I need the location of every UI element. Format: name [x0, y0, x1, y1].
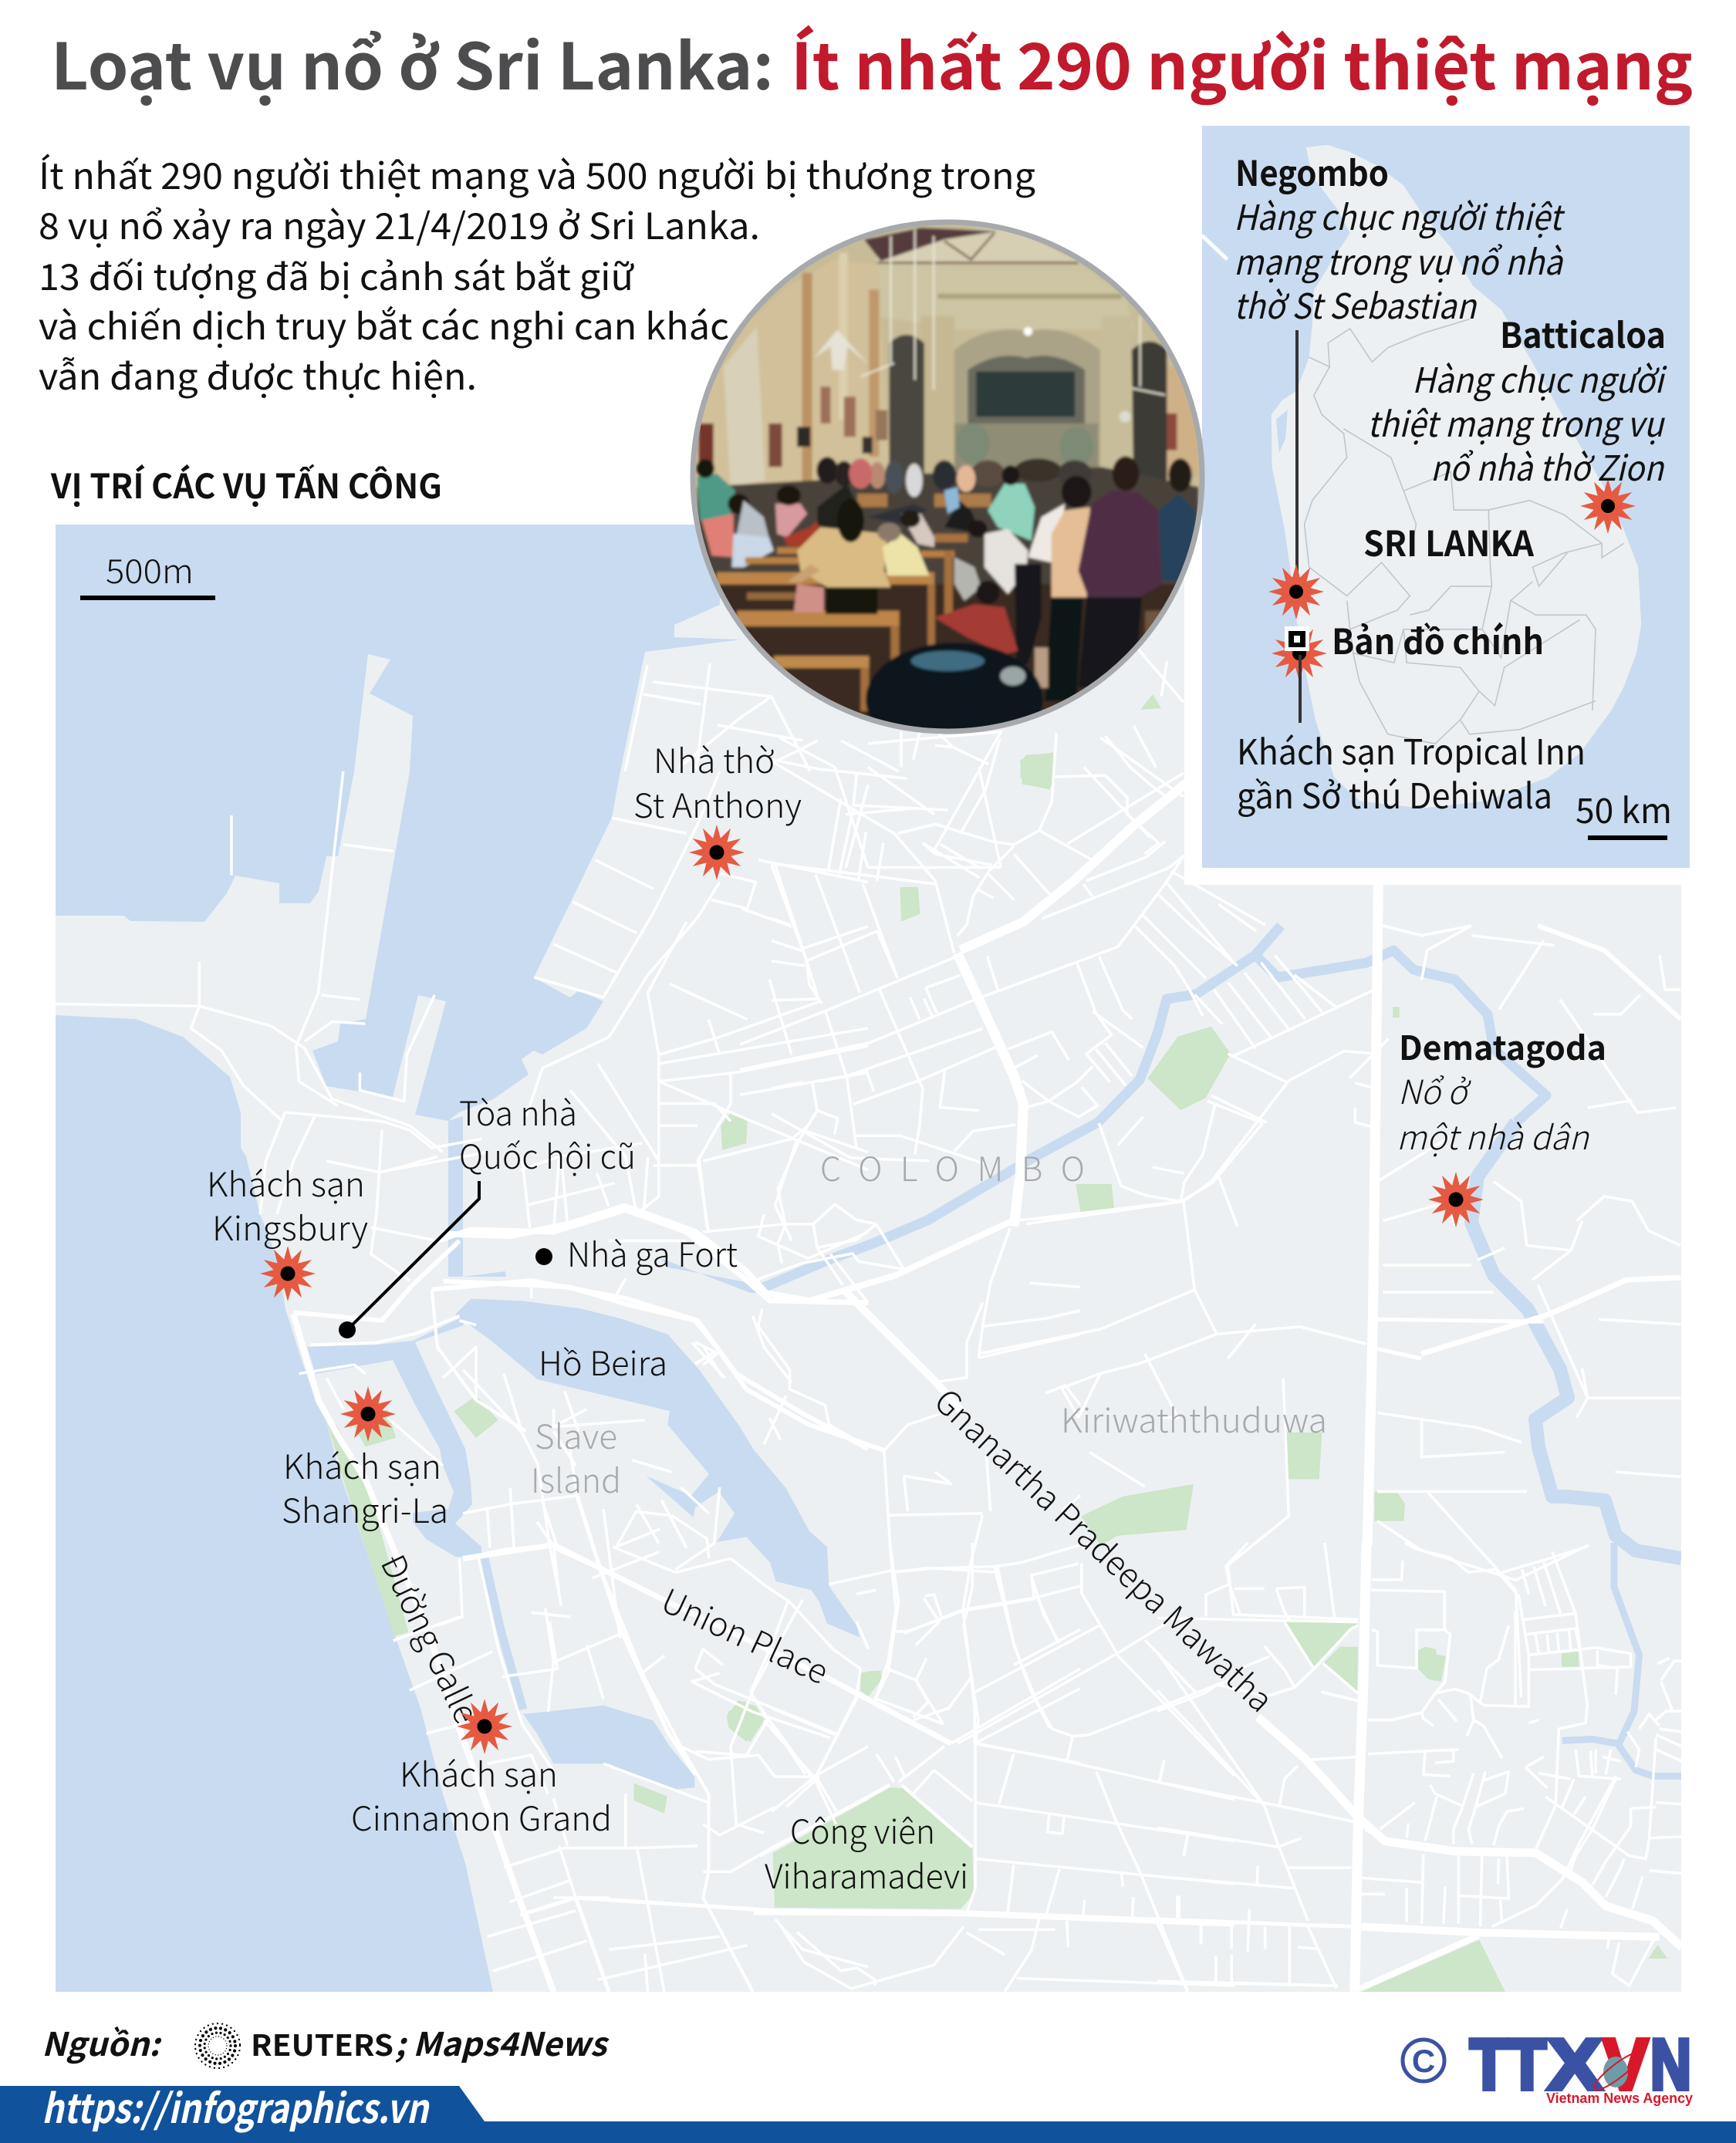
map labels: Union Place [654, 1575, 837, 1694]
inset labels: Hàng chục người [1412, 353, 1667, 403]
map labels: Island [531, 1455, 621, 1503]
source line: REUTERS [251, 2022, 393, 2064]
blast marker: Dematagoda [1428, 1172, 1484, 1227]
map labels: COLOMBO [820, 1143, 1085, 1191]
logo: TTXVN: N [1650, 2024, 1691, 2104]
map labels: Khách sạn [283, 1441, 441, 1489]
map labels: Gnanartha Pradeepa Mawatha [925, 1376, 1285, 1721]
inset labels: gần Sở thú Dehiwala [1237, 768, 1552, 818]
scale bar: 50 km [1588, 835, 1667, 840]
map labels [106, 545, 1606, 1898]
source line [42, 2019, 610, 2068]
panel: white margin around inset [1184, 525, 1736, 885]
map labels: Viharamadevi [765, 1851, 968, 1898]
map labels: Nhà thờ [654, 735, 775, 783]
map labels: Công viên [790, 1806, 935, 1854]
inset labels: Bản đồ chính [1332, 614, 1544, 664]
inset labels: mạng trong vụ nổ nhà [1234, 235, 1564, 285]
road network [56, 637, 1682, 1992]
map labels: Khách sạn [400, 1749, 558, 1797]
heading: attack locations: VỊ TRÍ CÁC VỤ TẤN CÔNG [50, 459, 442, 508]
copyright symbol: C [1412, 2043, 1435, 2079]
marker: Fort station [535, 1248, 552, 1265]
inset labels: Hàng chục người thiệt [1234, 190, 1565, 240]
map labels: 500m [106, 545, 194, 593]
blast marker: Batticaloa [1580, 478, 1636, 534]
map labels: Đường Galle [370, 1545, 492, 1730]
logo: TTXVN: TT [1470, 2024, 1546, 2104]
panel: Sri Lanka inset map [1202, 126, 1690, 868]
intro text block [39, 147, 1035, 400]
inset labels: thiệt mạng trong vụ [1367, 397, 1665, 447]
map labels: Nổ ở [1398, 1066, 1471, 1114]
island land shape [1202, 145, 1641, 808]
inset labels: SRI LANKA [1363, 516, 1535, 566]
blast marker: St Anthony [689, 825, 745, 880]
logo: TTXVN: Vietnam News Agency [1546, 2091, 1693, 2106]
footer URL: https://infographics.vn [42, 2077, 430, 2135]
callout line: old parliament building [339, 1181, 479, 1338]
map labels: St Anthony [633, 780, 802, 828]
map labels: Tòa nhà [459, 1088, 577, 1136]
map labels: một nhà dân [1397, 1112, 1590, 1159]
map labels: Cinnamon Grand [351, 1793, 612, 1841]
map labels: Kingsbury [212, 1203, 368, 1250]
photo: church interior after the blast [687, 216, 1211, 756]
intro text block: 13 đối tượng đã bị cảnh sát bắt giữ [39, 248, 635, 301]
copyright symbol [1403, 2040, 1444, 2081]
source line: Nguồn: [42, 2019, 162, 2066]
source line: ; [395, 2019, 408, 2066]
blast marker: Kingsbury [260, 1246, 316, 1301]
panel: Colombo street map [56, 525, 1682, 1992]
logo: TTXVN: X [1548, 2024, 1602, 2104]
title [51, 15, 1693, 108]
Tropical Inn leader line [1299, 655, 1302, 723]
intro text block: Ít nhất 290 người thiệt mạng và 500 người bị thương trong [39, 147, 1035, 200]
inset labels: Batticaloa [1500, 308, 1666, 358]
water: harbour, sea, lakes and canals [56, 525, 1682, 1992]
logo: TTXVN [1403, 2024, 1693, 2106]
title: Ít nhất 290 người thiệt mạng [791, 15, 1693, 108]
inset labels: thờ St Sebastian [1234, 278, 1478, 329]
map labels: Dematagoda [1399, 1022, 1606, 1070]
inset labels: 50 km [1576, 783, 1672, 833]
map labels: Hồ Beira [539, 1338, 667, 1385]
blast marker: Cinnamon Grand [457, 1699, 512, 1754]
inset labels: nổ nhà thờ Zion [1430, 440, 1665, 491]
intro text block: vẫn đang được thực hiện. [39, 347, 477, 400]
inset labels [1234, 146, 1672, 833]
logo: TTXVN: V [1603, 2024, 1648, 2104]
map labels: Shangri-La [282, 1485, 448, 1533]
inset labels: Khách sạn Tropical Inn [1237, 724, 1586, 775]
parks [324, 694, 1667, 1992]
intro text block: và chiến dịch truy bắt các nghi can khác [39, 297, 729, 350]
intro text block: 8 vụ nổ xảy ra ngày 21/4/2019 ở Sri Lanka. [39, 197, 760, 250]
footer bar [0, 2086, 1736, 2143]
blast marker: Tropical Inn [1272, 626, 1327, 681]
map labels: Khách sạn [207, 1159, 365, 1206]
map labels: Kiriwaththuduwa [1061, 1395, 1327, 1443]
map labels: Quốc hội cũ [459, 1131, 636, 1179]
inset labels: Negombo [1235, 146, 1389, 196]
blast marker: Shangri-La [340, 1386, 396, 1442]
main map locator square [1285, 626, 1309, 651]
photo ring [693, 222, 1202, 731]
map labels: Slave [535, 1411, 617, 1459]
map labels: Nhà ga Fort [567, 1229, 738, 1277]
blast marker: Negombo [1268, 564, 1324, 619]
scale bar: 500m [80, 596, 215, 600]
title: Loạt vụ nổ ở Sri Lanka: [51, 15, 774, 108]
source line: Maps4News [413, 2019, 610, 2066]
Negombo leader line [1295, 330, 1299, 592]
icon: Reuters dotted logo [195, 2023, 240, 2068]
